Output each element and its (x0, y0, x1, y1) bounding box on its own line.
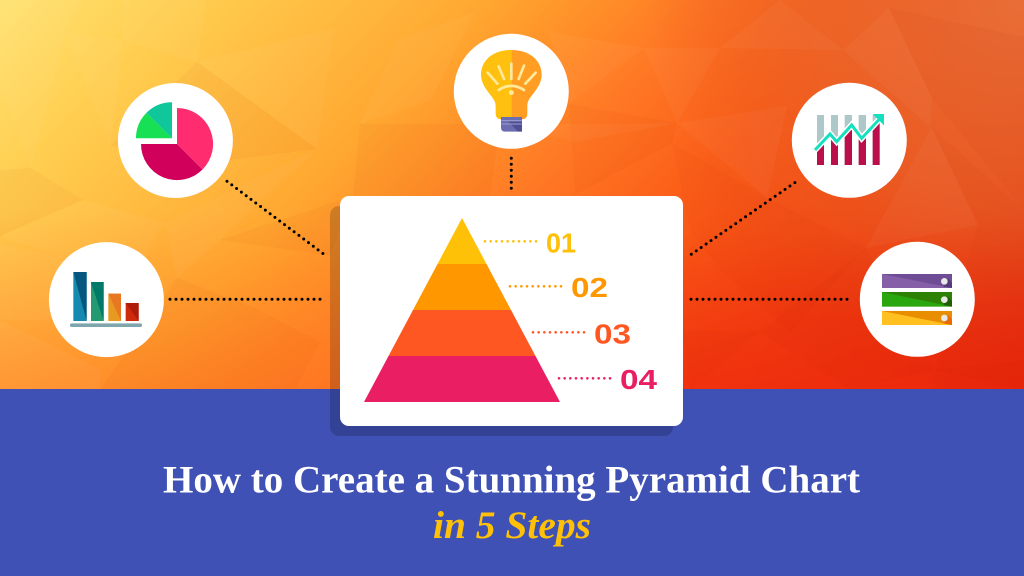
panel: pyramid chart (340, 196, 683, 426)
pyramid (364, 218, 560, 402)
label 04: 04 (620, 364, 657, 395)
subtitle: in 5 Steps (433, 503, 591, 547)
icon: growth chart (792, 83, 907, 198)
bottom blue band (0, 389, 1024, 576)
label 03 (533, 318, 631, 349)
title: How to Create a Stunning Pyramid Chart (163, 458, 860, 502)
connector: bars to panel (170, 298, 323, 301)
label 03: 03 (594, 318, 631, 349)
icon: pie chart (118, 83, 233, 198)
connector: growth chart to panel (691, 182, 795, 254)
panel shadow (330, 206, 673, 436)
icon: stacked server bars (860, 242, 975, 357)
connector: stack to panel (691, 298, 850, 301)
connector: bulb to panel (510, 158, 513, 189)
label 04 (559, 364, 657, 395)
label 01: 01 (546, 227, 576, 258)
connector: pie to panel (227, 181, 324, 254)
label 01 (485, 227, 576, 258)
icon: light bulb (454, 34, 569, 149)
label 02 (510, 272, 608, 303)
icon: bar chart (49, 242, 164, 357)
label 02: 02 (571, 272, 608, 303)
background: orange-red low-poly gradient (0, 0, 1024, 390)
